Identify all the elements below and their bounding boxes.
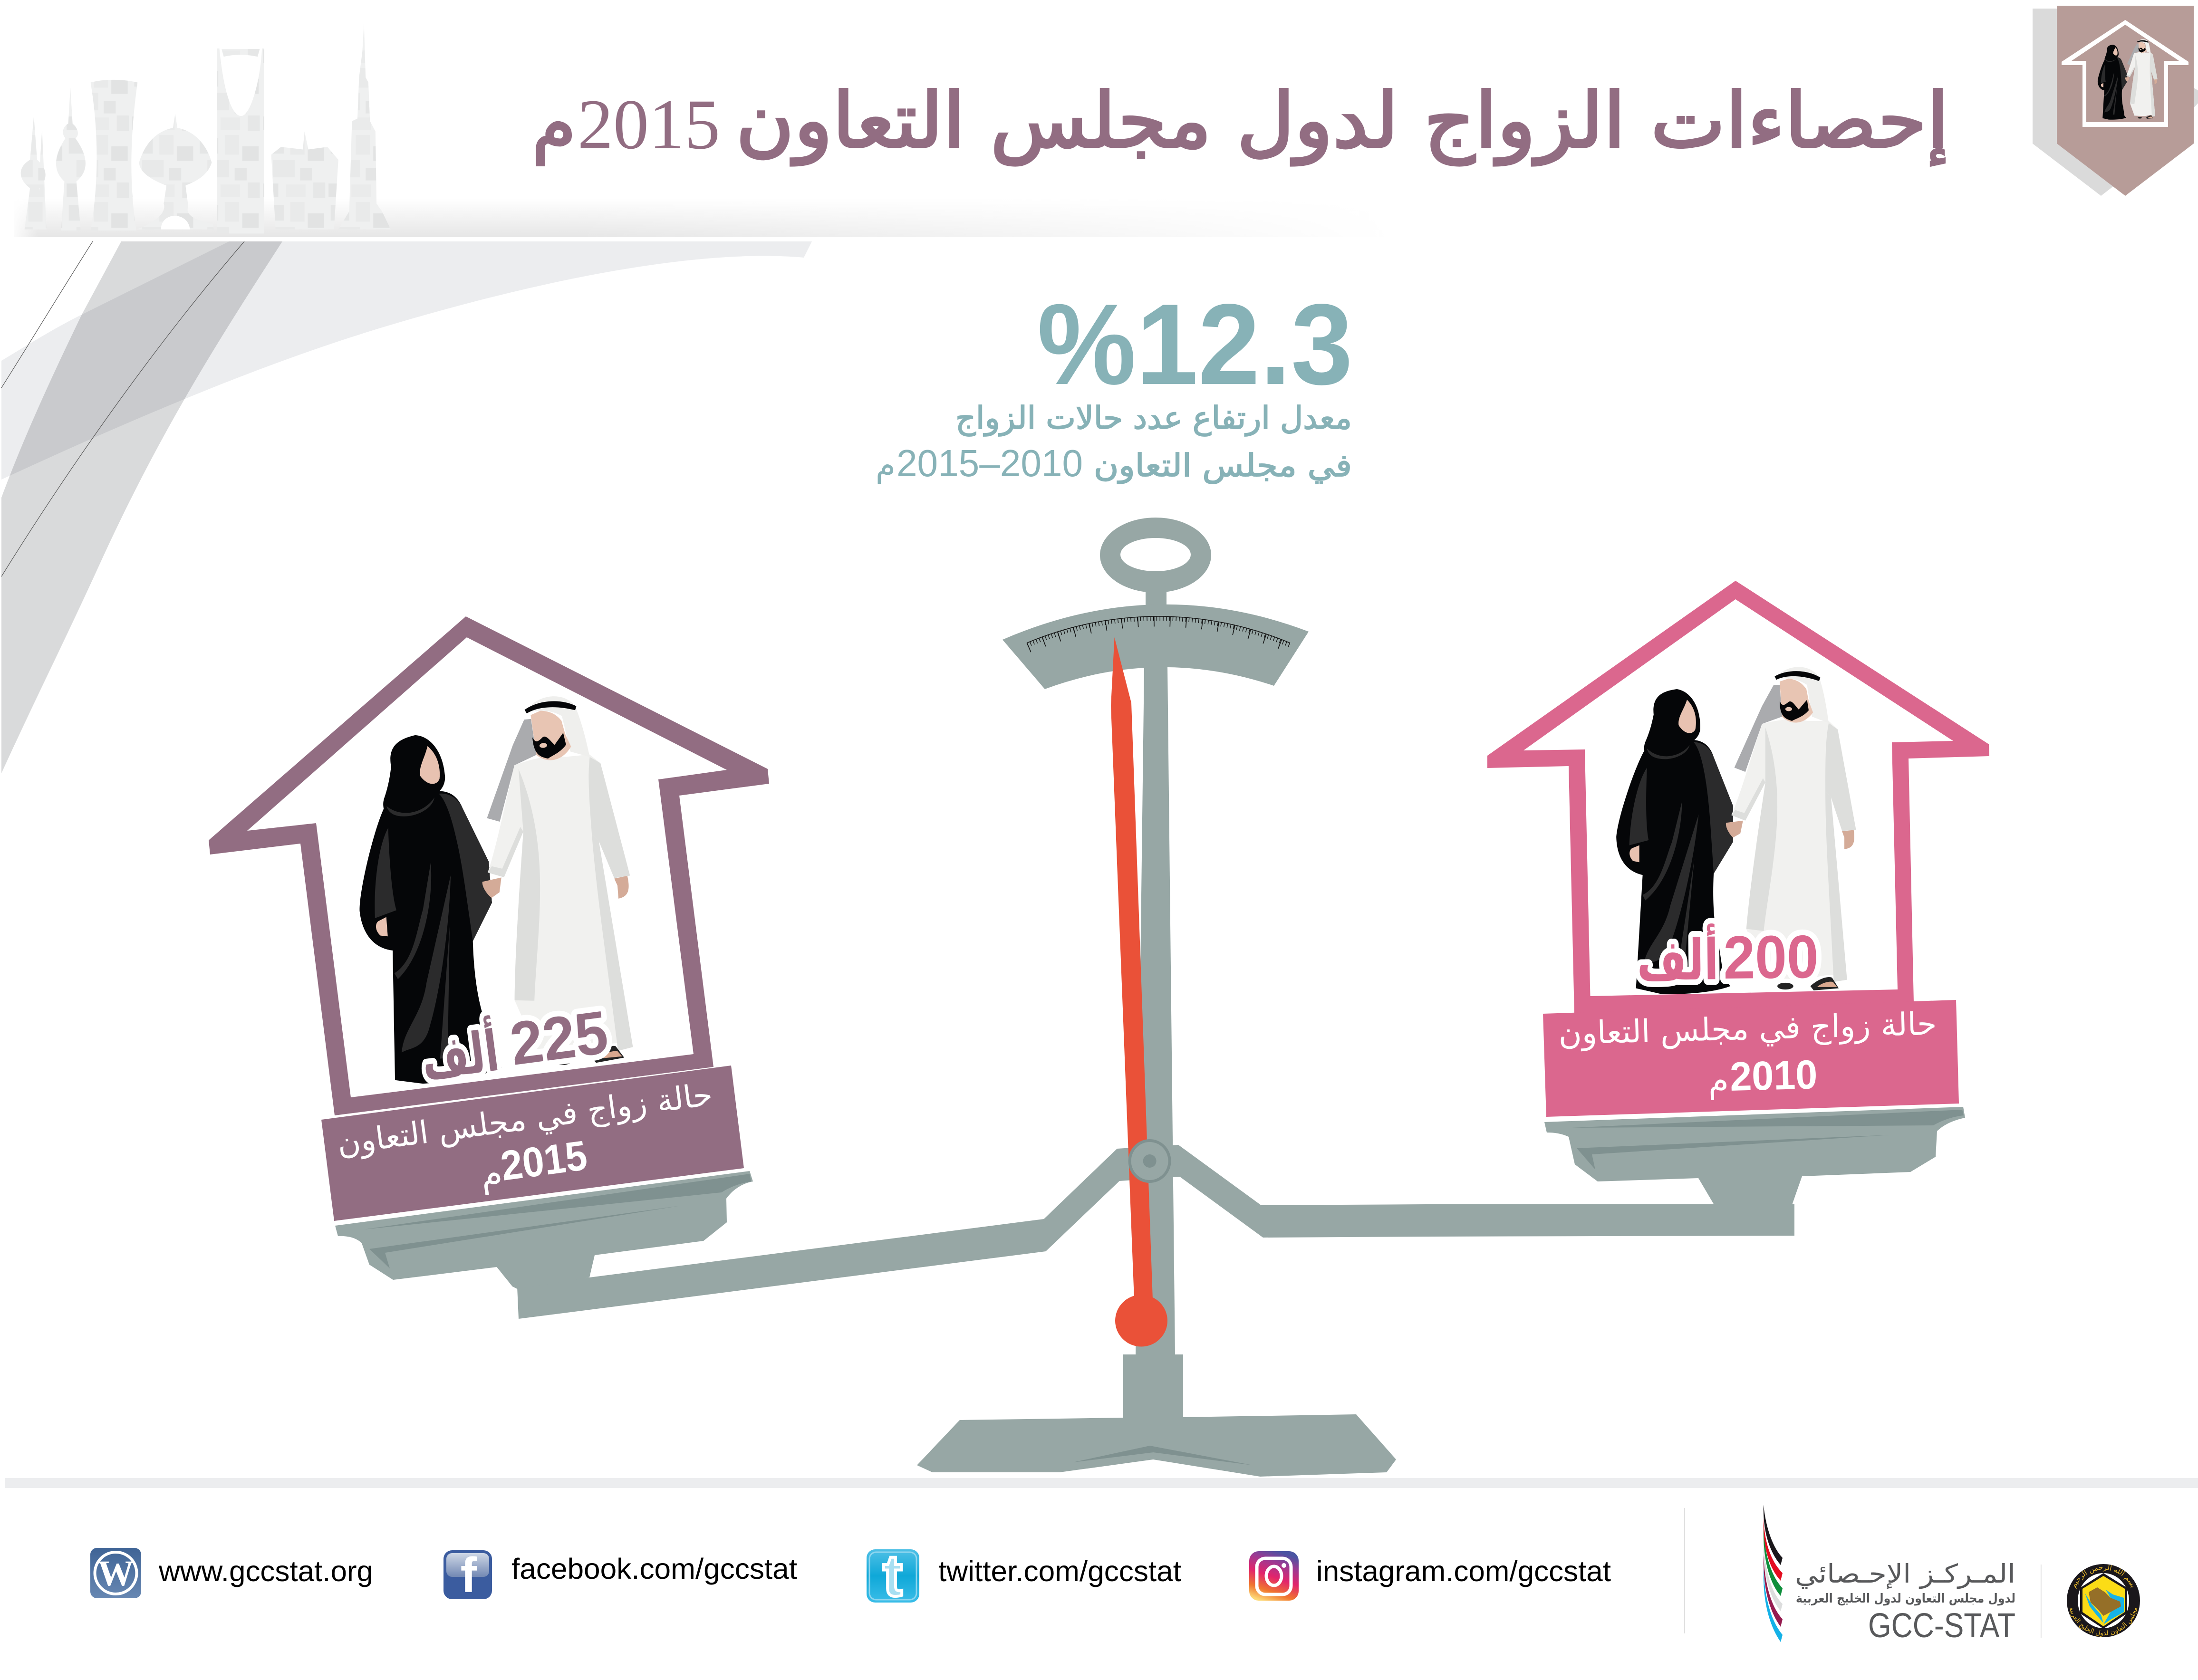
description text: م [876,447,896,484]
banner text: 2015 [498,1132,590,1190]
background swooshes [1,241,812,773]
description text: معدل ارتفاع عدد حالات الزواج [955,400,1352,436]
icon: wordpress: W [98,1554,134,1594]
scale: top ring and dial [1003,518,1309,689]
footer: instagram [1249,1551,1611,1601]
icon: instagram [1249,1551,1299,1601]
icon: twitter: t [883,1543,903,1609]
banner text: حالة زواج في مجلس التعاون [335,1076,715,1162]
logo: GCC-STAT text: لدول مجلس التعاون لدول الخليج العربية [1796,1592,2015,1606]
banner text: 2010 [1729,1052,1818,1100]
title: 2015 [578,85,720,164]
footer: twitter: twitter.com/gccstat [938,1555,1181,1587]
icon: twitter [867,1543,919,1609]
description text [876,400,1352,484]
logo: GCC-STAT ribbons [1764,1505,1783,1642]
house outline [209,616,769,1115]
value: 200 thousand: ألف [1637,923,1719,993]
icon: facebook [443,1548,492,1603]
left pan [335,1171,753,1289]
banner [321,1066,744,1221]
value: 225 thousand [417,998,612,1093]
title: م [532,83,576,165]
scale: red pointer [1111,637,1167,1347]
value: 225 thousand: ألف [417,1014,502,1093]
panel: 2010 house on right pan [1487,581,1989,1205]
logo: GCC seal: مجلس التعاون لدول الخليج العربية [2068,1606,2139,1637]
banner text: م [478,1152,505,1196]
couple figures [1616,667,1856,994]
value: 225 thousand: 225 [506,998,612,1078]
logo: GCC-STAT text: GCC-STAT [1868,1607,2015,1645]
logo: GCC seal [2067,1563,2140,1637]
footer separator [1684,1508,1685,1633]
icon: wordpress [90,1548,141,1598]
banner [1543,1000,1959,1117]
logo: GCC-STAT text [1795,1559,2015,1645]
banner text [1558,1006,1937,1100]
footer: facebook: facebook.com/gccstat [511,1553,797,1585]
scale: pivot hub [1130,1141,1170,1181]
logo: GCC seal: بسم الله الرحمن الرحيم [2069,1563,2138,1589]
description text: 2015–2010 [897,442,1083,484]
footer: website: www.gccstat.org [158,1555,373,1587]
ground line [5,1478,2198,1488]
footer: twitter [867,1543,1181,1609]
panel: 2015 house on left pan [209,616,769,1289]
header gradient band [10,199,1393,238]
scale: beam [517,1145,1794,1319]
banner text: حالة زواج في مجلس التعاون [1558,1006,1937,1052]
description text: في مجلس التعاون [1094,447,1352,484]
scale: central stem [1136,665,1175,1354]
value: 200 thousand [1637,923,1819,993]
right pan [1544,1107,1965,1205]
footer: instagram: instagram.com/gccstat [1316,1555,1611,1587]
icon: facebook: f [461,1548,477,1603]
banner text: م [1707,1061,1729,1100]
statistic: 12.3 percent [876,280,1353,484]
scale: base [917,1354,1396,1477]
badge: house with couple [2033,6,2198,196]
footer: facebook [443,1548,797,1603]
house outline [1487,581,1989,1015]
footer: website [90,1548,373,1598]
title: إحصاءات الزواج لدول مجلس التعاون [736,76,1949,166]
value: 200 thousand: 200 [1723,923,1819,992]
logo: GCC-STAT text: المـركـز الإحـصائي [1795,1559,2015,1589]
statistic: 12.3 percent: %12.3 [1037,280,1353,409]
couple figures [345,690,644,1089]
skyline of Gulf landmarks [21,23,391,233]
